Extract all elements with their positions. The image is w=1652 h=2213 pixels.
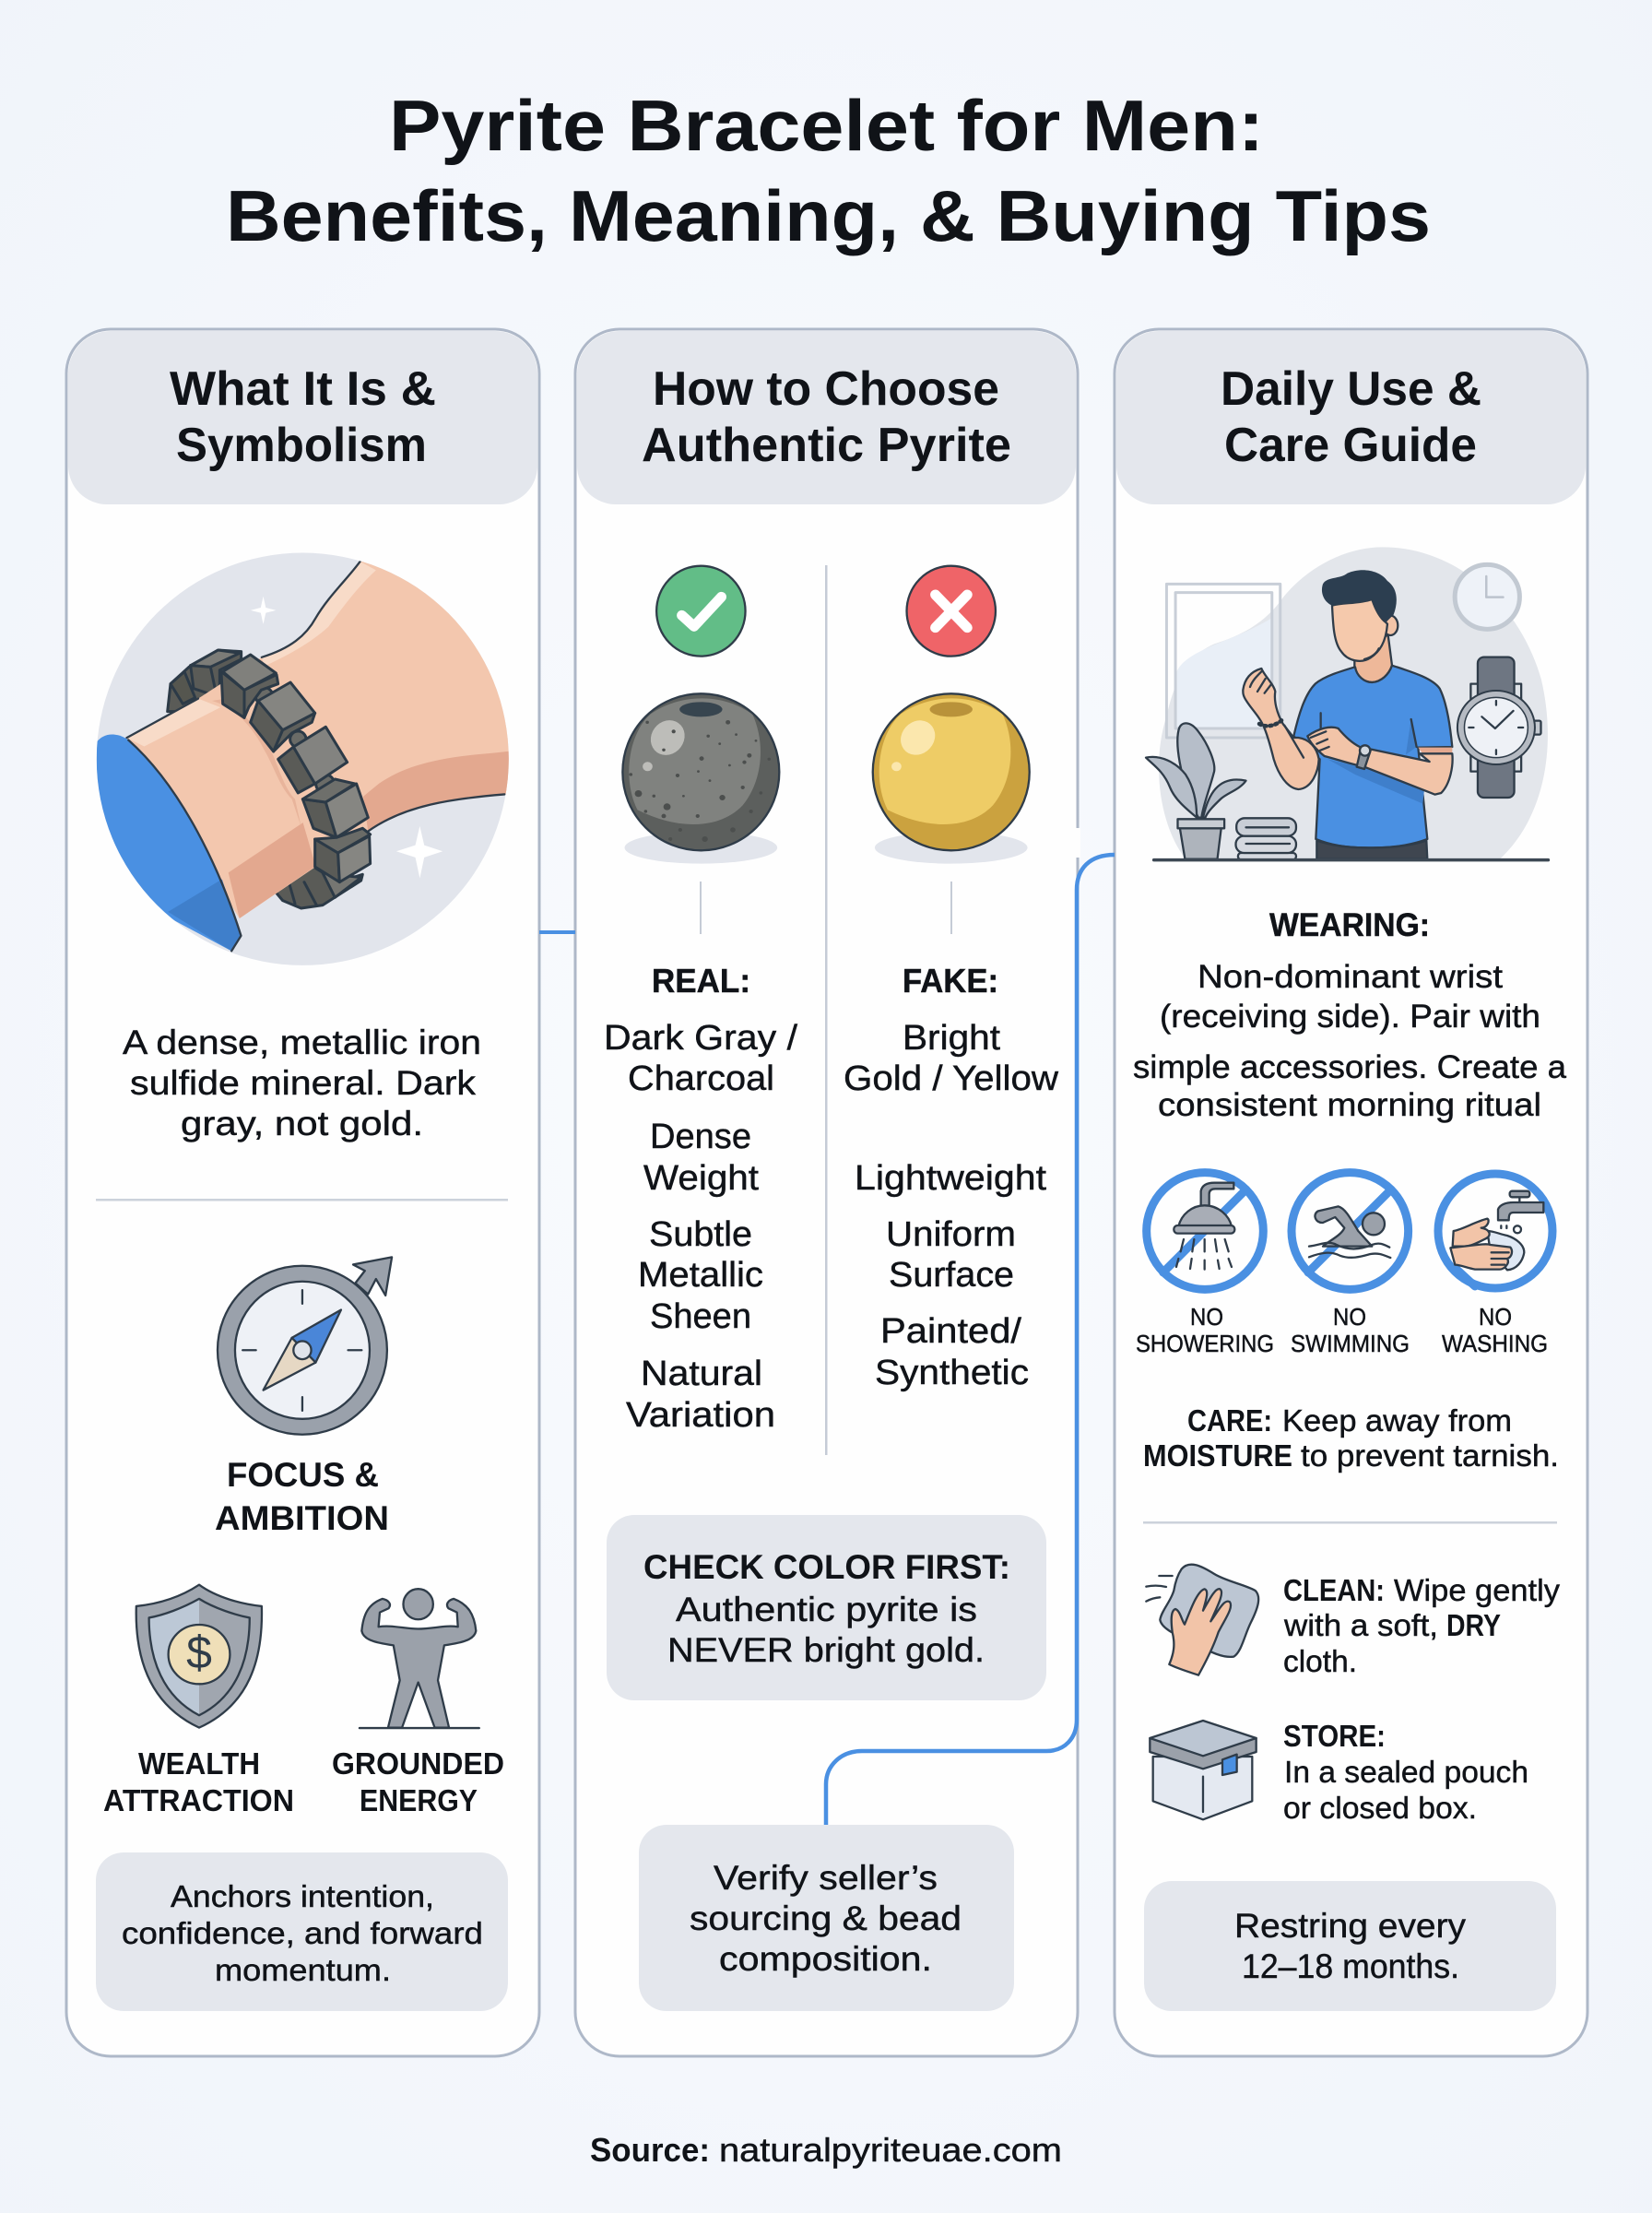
connector: panel one to panel two xyxy=(539,930,575,934)
label: no washing: NO xyxy=(1479,1303,1512,1331)
source line: Source: xyxy=(590,2131,710,2169)
text: store xyxy=(1283,1719,1528,1825)
text: clean: DRY xyxy=(1446,1608,1501,1642)
connector: panel two to panel three xyxy=(826,828,1115,1825)
label: no showering: SHOWERING xyxy=(1136,1330,1274,1357)
back bracelet beads xyxy=(168,650,362,908)
label: grounded energy xyxy=(332,1746,504,1817)
label: focus and ambition: FOCUS & xyxy=(227,1456,379,1494)
callout: verify seller: composition. xyxy=(719,1940,932,1978)
callout: restring xyxy=(1144,1881,1556,2011)
icon: no swimming xyxy=(1292,1173,1409,1289)
label: no showering: NO xyxy=(1190,1303,1223,1331)
label: wealth attraction xyxy=(103,1746,294,1817)
panel: what it is and symbolism xyxy=(66,329,539,2056)
panel header: daily use: Care Guide xyxy=(1224,419,1477,472)
plant xyxy=(1146,723,1246,859)
panel header: daily use xyxy=(1116,331,1586,504)
front bracelet beads xyxy=(212,655,371,882)
icon: compass with arrow xyxy=(218,1257,392,1435)
title: Benefits, Meaning, & Buying Tips xyxy=(226,175,1431,256)
panel header: daily use: Daily Use & xyxy=(1221,362,1481,416)
description text: sulfide mineral. Dark xyxy=(130,1064,477,1102)
column: real traits: Dense xyxy=(650,1118,751,1156)
column: fake traits: Surface xyxy=(889,1256,1014,1295)
callout: anchors intention: confidence, and forward xyxy=(122,1916,483,1950)
arm xyxy=(97,557,532,951)
icon: red cross xyxy=(907,566,996,657)
illustration: fake gold bead xyxy=(873,693,1030,864)
column: fake traits: Gold / Yellow xyxy=(844,1059,1059,1098)
icon: shield with dollar coin: $ xyxy=(186,1627,212,1678)
text: care moisture: MOISTURE xyxy=(1143,1438,1292,1473)
text: clean: CLEAN: xyxy=(1283,1573,1385,1607)
text: clean xyxy=(1283,1573,1561,1678)
label: no showering xyxy=(1136,1303,1274,1357)
text: clean: cloth. xyxy=(1283,1644,1357,1678)
text: clean: Wipe gently xyxy=(1394,1573,1561,1607)
callout: check color first: NEVER bright gold. xyxy=(667,1631,985,1669)
column: fake traits: Synthetic xyxy=(875,1354,1029,1392)
man figure xyxy=(1243,570,1453,859)
column: fake traits xyxy=(844,962,1059,1392)
text: wearing: consistent morning ritual xyxy=(1158,1087,1541,1123)
text: store: or closed box. xyxy=(1283,1791,1477,1825)
callout: anchors intention: Anchors intention, xyxy=(171,1879,434,1913)
illustration: man with bracelet and watch xyxy=(1146,547,1548,860)
text: care moisture xyxy=(1143,1403,1559,1473)
column: real traits: Weight xyxy=(643,1159,759,1198)
panel: daily use and care guide xyxy=(1115,329,1587,2056)
callout: check color first xyxy=(607,1515,1046,1700)
callout: restring: 12–18 months. xyxy=(1242,1947,1459,1985)
column: real traits: Subtle xyxy=(649,1215,752,1254)
label: no swimming: NO xyxy=(1333,1303,1366,1331)
callout: verify seller: Verify seller’s xyxy=(714,1859,938,1897)
panel: how to choose authentic pyrite xyxy=(575,329,1078,2056)
panel header: what it is: What It Is & xyxy=(170,362,436,416)
column: fake traits: Painted/ xyxy=(880,1312,1021,1351)
far arm raised with bracelet xyxy=(1243,669,1319,789)
callout: check color first: CHECK COLOR FIRST: xyxy=(643,1548,1010,1586)
text: clean: with a soft, xyxy=(1283,1608,1438,1642)
callout: anchors intention: momentum. xyxy=(215,1953,391,1987)
title xyxy=(226,85,1431,256)
label: wealth attraction: WEALTH xyxy=(138,1746,260,1781)
panel header: how to choose xyxy=(577,331,1076,504)
icon: no showering xyxy=(1147,1173,1263,1289)
callout: anchors intention xyxy=(96,1852,508,2011)
text: care moisture: CARE: xyxy=(1187,1403,1272,1438)
callout: restring: Restring every xyxy=(1234,1907,1467,1945)
column: fake traits: Bright xyxy=(903,1019,1000,1058)
panel header: how to choose: Authentic Pyrite xyxy=(642,419,1011,472)
description text: A dense, metallic iron xyxy=(123,1024,481,1061)
label: no swimming xyxy=(1291,1303,1410,1357)
title: Pyrite Bracelet for Men: xyxy=(389,85,1264,166)
source line xyxy=(590,2131,1062,2169)
text: store: In a sealed pouch xyxy=(1284,1755,1528,1789)
source line: naturalpyriteuae.com xyxy=(719,2131,1062,2169)
illustration: real pyrite bead xyxy=(622,693,779,864)
text: wearing: WEARING: xyxy=(1269,907,1430,943)
panel header: how to choose: How to Choose xyxy=(653,362,999,416)
folded towels xyxy=(1236,818,1296,859)
label: no washing xyxy=(1442,1303,1548,1357)
wall clock xyxy=(1455,564,1519,629)
column: real traits xyxy=(604,962,797,1435)
column: real traits: REAL: xyxy=(652,962,750,1000)
label: no washing: WASHING xyxy=(1442,1330,1548,1357)
description text xyxy=(123,1024,481,1142)
column: real traits: Variation xyxy=(626,1396,775,1435)
column: fake traits: FAKE: xyxy=(903,962,998,1000)
label: no swimming: SWIMMING xyxy=(1291,1330,1410,1357)
description text: gray, not gold. xyxy=(181,1105,423,1142)
near arm and hand xyxy=(1307,728,1453,795)
text: care moisture: to prevent tarnish. xyxy=(1301,1438,1559,1473)
label: grounded energy: ENERGY xyxy=(360,1783,478,1817)
callout: verify seller: sourcing & bead xyxy=(690,1899,962,1937)
icon: grounded strong figure xyxy=(360,1589,479,1728)
label: focus and ambition: AMBITION xyxy=(215,1499,389,1537)
text: wearing: (receiving side). Pair with xyxy=(1160,999,1540,1035)
column: real traits: Charcoal xyxy=(628,1059,774,1098)
label: grounded energy: GROUNDED xyxy=(332,1746,504,1781)
icon: green check xyxy=(656,566,746,657)
text: wearing: Non-dominant wrist xyxy=(1198,959,1503,995)
text: care moisture: Keep away from xyxy=(1282,1403,1512,1438)
column: fake traits: Lightweight xyxy=(855,1159,1046,1198)
callout: check color first: Authentic pyrite is xyxy=(676,1591,977,1628)
wrist watch xyxy=(1457,657,1540,798)
text: store: STORE: xyxy=(1283,1719,1386,1753)
column: real traits: Dark Gray / xyxy=(604,1019,797,1058)
column: real traits: Natural xyxy=(641,1355,762,1393)
icon: hand wiping cloth xyxy=(1146,1565,1258,1675)
column: real traits: Metallic xyxy=(638,1256,763,1295)
illustration: wrist with pyrite bracelet xyxy=(97,553,532,965)
icon: shield with dollar coin xyxy=(136,1585,262,1728)
callout: verify seller xyxy=(639,1825,1014,2011)
label: wealth attraction: ATTRACTION xyxy=(103,1783,294,1817)
icon: no washing xyxy=(1438,1174,1552,1288)
column: fake traits: Uniform xyxy=(886,1215,1016,1254)
label: focus and ambition xyxy=(215,1456,389,1537)
text: wearing: simple accessories. Create a xyxy=(1133,1049,1567,1085)
panel header: what it is xyxy=(68,331,537,504)
icon: closed storage box xyxy=(1150,1721,1257,1819)
text: wearing xyxy=(1133,907,1567,1123)
panel header: what it is: Symbolism xyxy=(176,419,427,472)
column: real traits: Sheen xyxy=(650,1297,751,1336)
